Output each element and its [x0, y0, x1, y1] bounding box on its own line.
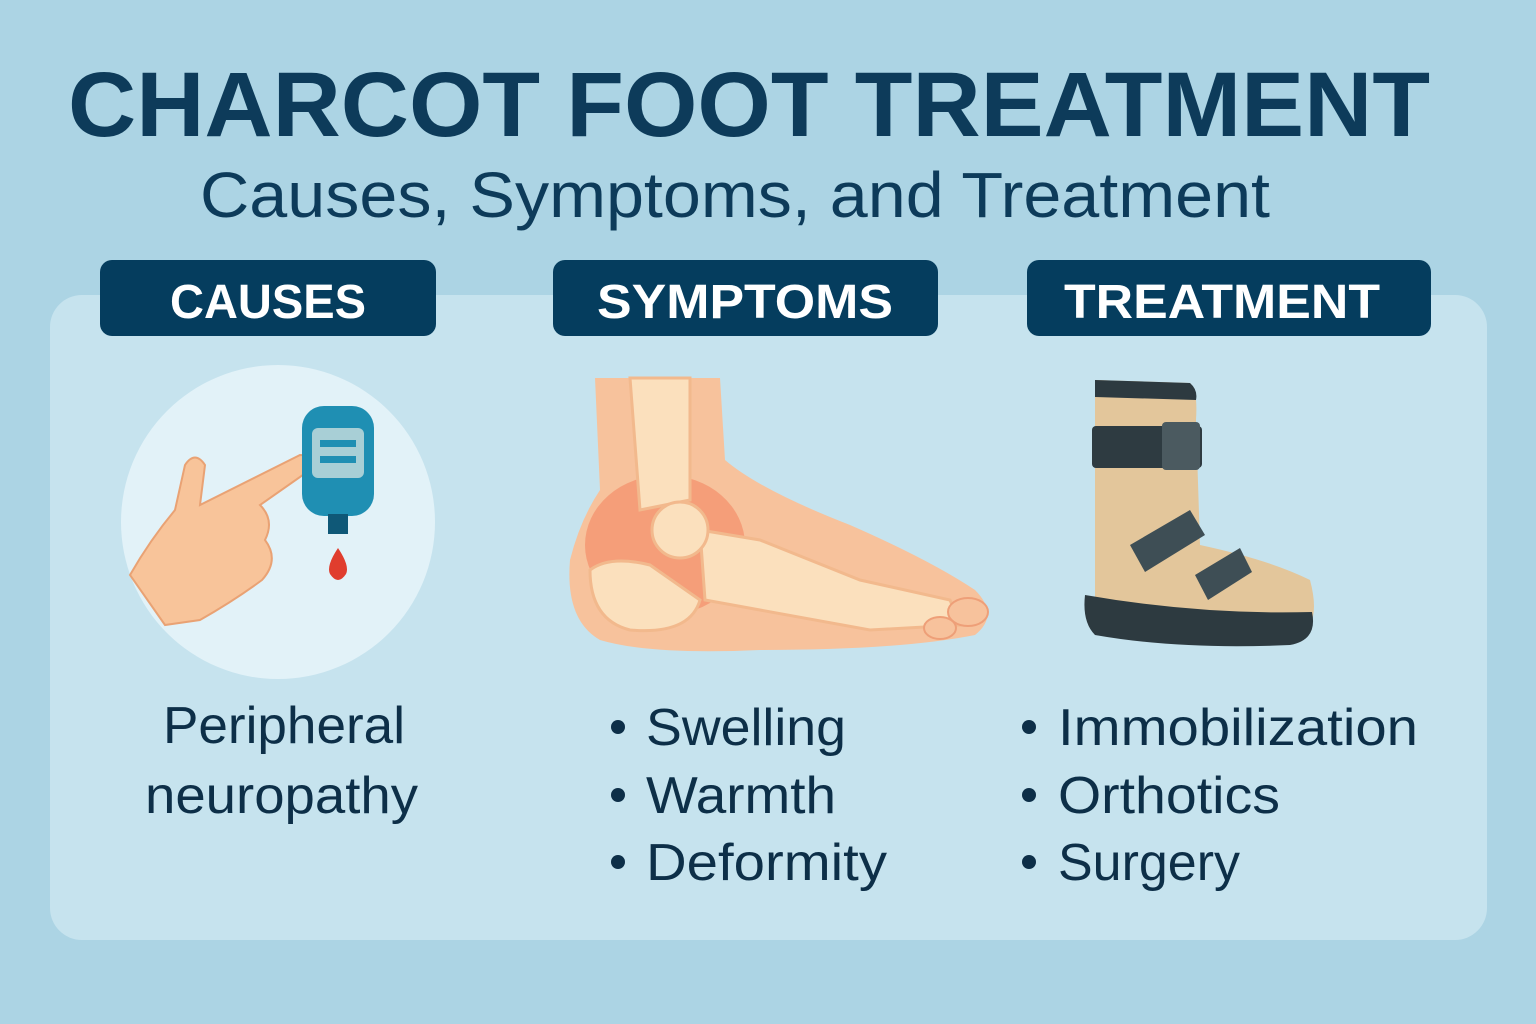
list: treatment: Surgery — [1058, 834, 1240, 892]
heading: causes: CAUSES — [170, 276, 366, 329]
list: symptoms — [611, 699, 887, 892]
text: causes — [145, 697, 418, 825]
heading: causes — [100, 260, 436, 336]
list: symptoms: Deformity — [646, 834, 887, 892]
heading: treatment — [1027, 260, 1431, 336]
title: CHARCOT FOOT TREATMENT — [68, 54, 1430, 156]
heading: symptoms: SYMPTOMS — [597, 276, 893, 329]
text: causes: Peripheral — [163, 697, 405, 755]
subtitle: Causes, Symptoms, and Treatment — [200, 159, 1270, 231]
heading: symptoms — [553, 260, 938, 336]
icon: foot with inflamed joint — [569, 378, 988, 651]
text: causes: neuropathy — [145, 767, 418, 825]
list: symptoms: Swelling — [646, 699, 846, 757]
list: symptoms: Warmth — [646, 767, 836, 825]
icon: glucose meter and finger — [121, 365, 435, 679]
list: treatment: Orthotics — [1058, 767, 1280, 825]
heading: treatment: TREATMENT — [1064, 276, 1380, 329]
panel: content background — [50, 295, 1487, 940]
list: treatment: Immobilization — [1058, 699, 1418, 757]
icon: walking boot — [1084, 380, 1314, 646]
list: treatment — [1022, 699, 1418, 892]
